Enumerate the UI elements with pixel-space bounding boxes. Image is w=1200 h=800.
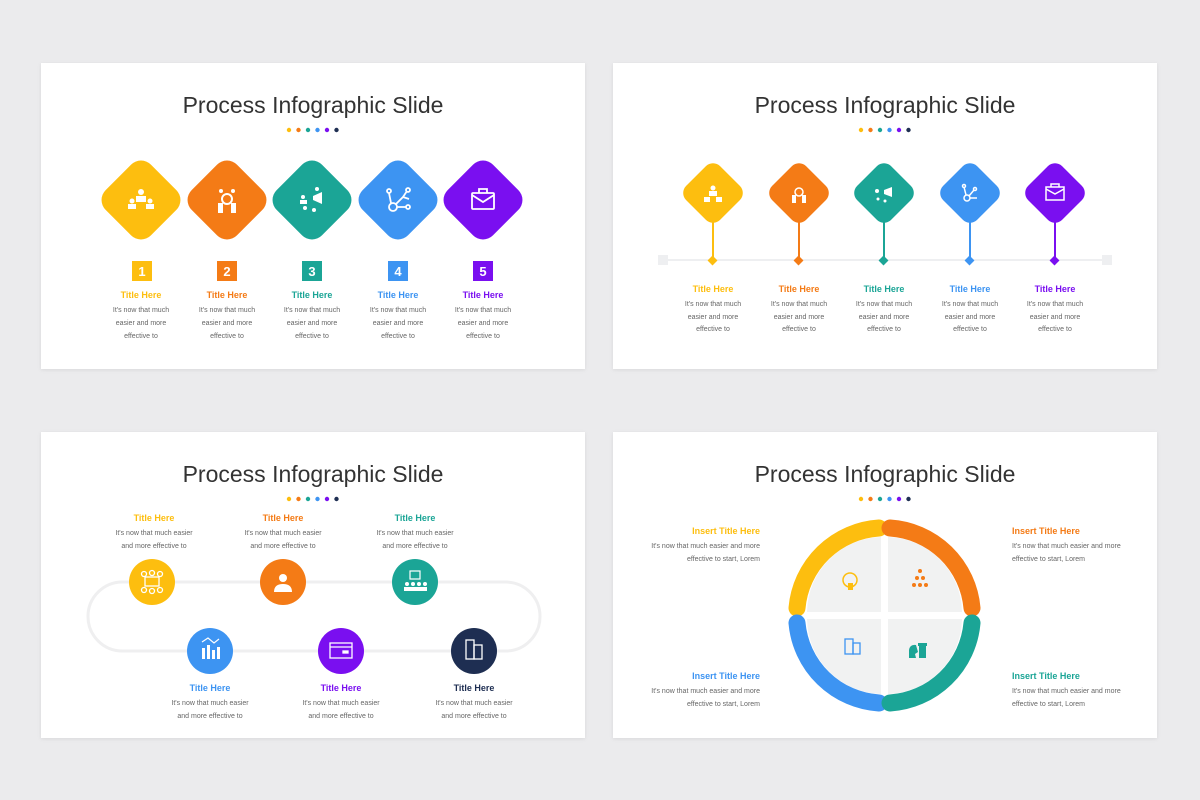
step: orange top: It's now that much easier: [244, 530, 322, 537]
step 4: 4: [394, 264, 402, 279]
step: navy bottom: [435, 628, 513, 720]
step: yellow top: [115, 513, 193, 605]
text: top left: [651, 526, 760, 563]
pin 2: Title Here: [779, 284, 819, 294]
step 1: It's now that much: [113, 307, 169, 314]
color dots: [287, 497, 339, 501]
pin 5: easier and more: [1030, 314, 1080, 321]
panel: racetrack circles: [41, 432, 585, 738]
step 4: It's now that much: [370, 307, 426, 314]
pin 3: [850, 159, 918, 333]
pin 2: effective to: [782, 326, 816, 333]
step 2: easier and more: [202, 320, 252, 327]
text: bottom left: Insert Title Here: [692, 671, 760, 681]
pin 5: effective to: [1038, 326, 1072, 333]
color dots: [859, 497, 911, 501]
step: navy bottom: Title Here: [454, 683, 494, 693]
step: orange top: [244, 513, 322, 605]
step: teal top: and more effective to: [382, 543, 448, 550]
title: Process Infographic Slide: [183, 92, 443, 118]
quadrant diagram: [797, 528, 972, 703]
step: teal top: Title Here: [395, 513, 435, 523]
pin 1: effective to: [696, 326, 730, 333]
pin 5: Title Here: [1035, 284, 1075, 294]
text: bottom right: Insert Title Here: [1012, 671, 1080, 681]
step 1: [96, 155, 186, 340]
title: Process Infographic Slide: [755, 461, 1015, 487]
step 5: 5: [479, 264, 487, 279]
pin 3: effective to: [867, 326, 901, 333]
pin 1: [679, 159, 747, 333]
timeline line: [658, 255, 1112, 265]
step: yellow top: It's now that much easier: [115, 530, 193, 537]
step 4: [353, 155, 443, 340]
step: purple bottom: and more effective to: [308, 713, 374, 720]
step: yellow top: and more effective to: [121, 543, 187, 550]
step 3: [267, 155, 357, 340]
pin 4: effective to: [953, 326, 987, 333]
text: bottom left: [651, 671, 760, 708]
step 3: 3: [308, 264, 316, 279]
step 3: easier and more: [287, 320, 337, 327]
step: purple bottom: It's now that much easier: [302, 700, 380, 707]
title: Process Infographic Slide: [183, 461, 443, 487]
step 1: easier and more: [116, 320, 166, 327]
step 4: easier and more: [373, 320, 423, 327]
pin 2: [765, 159, 833, 333]
step 5: Title Here: [463, 290, 503, 300]
title: Process Infographic Slide: [755, 92, 1015, 118]
step 3: It's now that much: [284, 307, 340, 314]
text: bottom left: effective to start, Lorem: [687, 701, 760, 708]
pin 3: Title Here: [864, 284, 904, 294]
step: orange top: and more effective to: [250, 543, 316, 550]
pin 2: easier and more: [774, 314, 824, 321]
pin 4: [936, 159, 1004, 333]
pin 5: [1021, 159, 1089, 333]
pin 4: easier and more: [945, 314, 995, 321]
panel: diamonds with numbers: [41, 63, 585, 369]
pin 2: It's now that much: [771, 301, 827, 308]
pin 3: easier and more: [859, 314, 909, 321]
step 1: effective to: [124, 333, 158, 340]
step 2: Title Here: [207, 290, 247, 300]
step 5: effective to: [466, 333, 500, 340]
step: yellow top: Title Here: [134, 513, 174, 523]
text: bottom right: It's now that much easier and more: [1012, 688, 1121, 695]
panel: quadrant circle: [613, 432, 1157, 738]
text: top right: It's now that much easier and more: [1012, 543, 1121, 550]
step: orange top: Title Here: [263, 513, 303, 523]
step: purple bottom: [302, 628, 380, 720]
step 4: effective to: [381, 333, 415, 340]
pin 4: It's now that much: [942, 301, 998, 308]
step: blue bottom: It's now that much easier: [171, 700, 249, 707]
step 2: [182, 155, 272, 340]
text: top left: Insert Title Here: [692, 526, 760, 536]
step 5: It's now that much: [455, 307, 511, 314]
step: blue bottom: [171, 628, 249, 720]
text: top right: effective to start, Lorem: [1012, 556, 1085, 563]
text: bottom left: It's now that much easier and more: [651, 688, 760, 695]
text: top right: [1012, 526, 1121, 563]
panel: timeline pins: [613, 63, 1157, 369]
step 3: effective to: [295, 333, 329, 340]
pin 1: Title Here: [693, 284, 733, 294]
text: top right: Insert Title Here: [1012, 526, 1080, 536]
text: bottom right: [1012, 671, 1121, 708]
step: navy bottom: It's now that much easier: [435, 700, 513, 707]
racetrack: [88, 582, 540, 651]
pin 5: It's now that much: [1027, 301, 1083, 308]
step: blue bottom: and more effective to: [177, 713, 243, 720]
step: teal top: It's now that much easier: [376, 530, 454, 537]
pin 4: Title Here: [950, 284, 990, 294]
text: top left: effective to start, Lorem: [687, 556, 760, 563]
step 4: Title Here: [378, 290, 418, 300]
step 5: easier and more: [458, 320, 508, 327]
step 1: Title Here: [121, 290, 161, 300]
pin 3: It's now that much: [856, 301, 912, 308]
text: top left: It's now that much easier and more: [651, 543, 760, 550]
pin 1: It's now that much: [685, 301, 741, 308]
step 2: 2: [223, 264, 231, 279]
step 2: effective to: [210, 333, 244, 340]
step: navy bottom: and more effective to: [441, 713, 507, 720]
color dots: [859, 128, 911, 132]
step: purple bottom: Title Here: [321, 683, 361, 693]
step 3: Title Here: [292, 290, 332, 300]
step 2: It's now that much: [199, 307, 255, 314]
pin 1: easier and more: [688, 314, 738, 321]
color dots: [287, 128, 339, 132]
icons: [843, 573, 857, 590]
text: bottom right: effective to start, Lorem: [1012, 701, 1085, 708]
step 5: [438, 155, 528, 340]
step: teal top: [376, 513, 454, 605]
step 1: 1: [138, 264, 146, 279]
step: blue bottom: Title Here: [190, 683, 230, 693]
